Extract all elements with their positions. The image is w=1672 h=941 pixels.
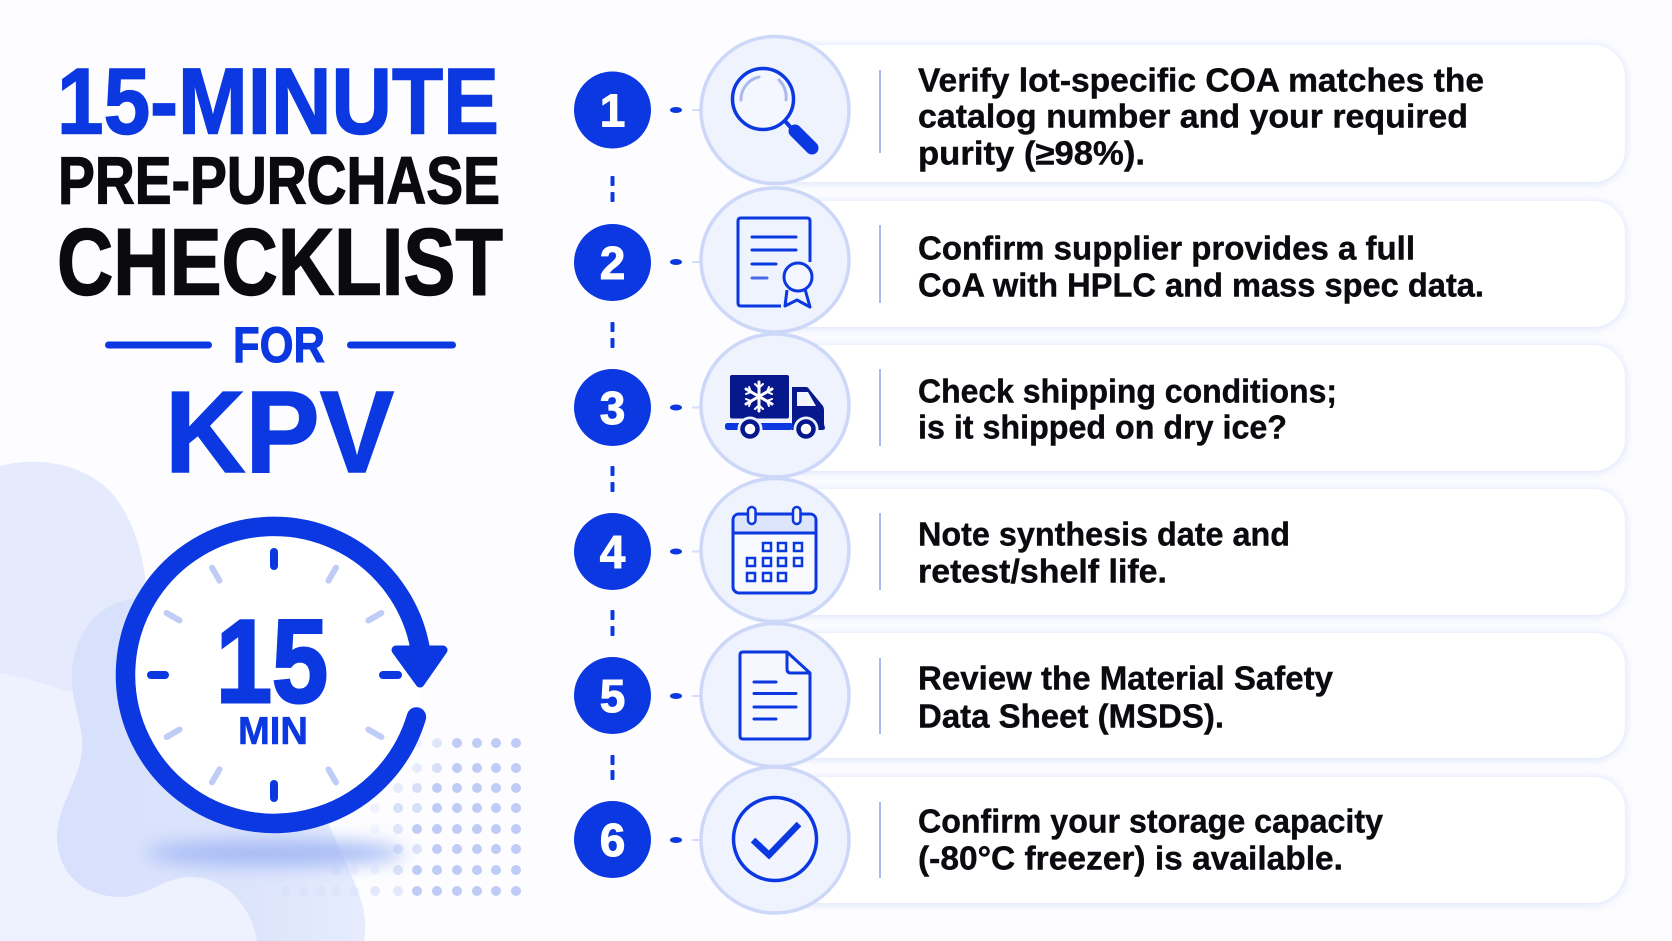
icon: calendar: [701, 478, 849, 622]
step 4 text: Note synthesis date and: [918, 516, 1290, 552]
step 5 text: Review the Material Safety: [918, 660, 1334, 696]
card 2: [745, 201, 1625, 327]
timer clock icon: [125, 526, 443, 823]
step 6 text: (-80°C freezer) is available.: [918, 840, 1343, 876]
number badge 5: [574, 657, 651, 734]
title line: CHECKLIST: CHECKLIST: [57, 210, 503, 316]
step 5: [574, 624, 1625, 766]
link dot: [670, 259, 702, 265]
divider: [879, 658, 881, 734]
card 5: [745, 633, 1625, 758]
clock number: 15: [216, 596, 328, 728]
card 3: [745, 345, 1625, 471]
card 4: [745, 489, 1625, 615]
title line: PRE-PURCHASE: PRE-PURCHASE: [58, 144, 500, 218]
number badge 2: 2: [600, 237, 625, 289]
link dot: [670, 548, 702, 554]
number badge 2: [574, 224, 651, 301]
decorative background blobs: [0, 462, 365, 941]
clock face: [126, 527, 422, 823]
step 3: [574, 334, 1625, 477]
card 1: [745, 45, 1625, 182]
step 3 text: [918, 372, 1337, 446]
step 4 text: [918, 516, 1290, 590]
circular arrow: [125, 526, 443, 823]
step 2: [574, 188, 1625, 332]
FOR divider: [105, 317, 456, 373]
divider: [879, 70, 881, 153]
card 6: [745, 777, 1625, 903]
step 5 text: Data Sheet (MSDS).: [918, 698, 1224, 734]
icon: magnifying glass: [701, 36, 849, 184]
minute ticks: [151, 552, 398, 798]
step 3 text: Check shipping conditions;: [918, 372, 1337, 410]
icon: document: [701, 624, 849, 766]
step 6 text: [918, 802, 1384, 876]
step 6: [574, 767, 1625, 913]
number badge 1: 1: [600, 84, 625, 136]
divider: [879, 802, 881, 878]
step 1 text: [918, 62, 1484, 172]
number badge 1: [574, 72, 651, 148]
step 1 text: catalog number and your required: [918, 98, 1468, 134]
title line: KPV: KPV: [165, 367, 394, 497]
connectors between numbered steps: [610, 176, 614, 780]
link dot: [670, 404, 702, 410]
link dot: [670, 837, 702, 843]
number badge 4: [574, 513, 651, 590]
step 3 text: is it shipped on dry ice?: [918, 408, 1287, 446]
step 6 text: Confirm your storage capacity: [918, 802, 1384, 840]
divider: [879, 225, 881, 303]
icon: certificate: [701, 188, 849, 332]
FOR divider: FOR: [233, 317, 325, 373]
link dot: [670, 693, 702, 699]
halftone dots: [281, 738, 521, 896]
step 2 text: CoA with HPLC and mass spec data.: [918, 266, 1484, 304]
number badge 3: 3: [600, 382, 625, 434]
clock shadow: [145, 840, 405, 866]
step 2 text: [918, 230, 1484, 304]
step 1 text: Verify lot-specific COA matches the: [918, 62, 1484, 98]
number badge 3: [574, 369, 651, 446]
step 5 text: [918, 660, 1334, 734]
step 4 text: retest/shelf life.: [918, 552, 1167, 590]
icon: check mark: [701, 767, 849, 913]
clock unit: MIN: [238, 710, 308, 753]
divider: [879, 513, 881, 590]
icon: refrigerated truck: [701, 334, 849, 477]
number badge 6: [574, 801, 651, 878]
step 2 text: Confirm supplier provides a full: [918, 230, 1415, 266]
number badge 6: 6: [600, 814, 625, 866]
step 1 text: purity (≥98%).: [918, 134, 1145, 172]
link dot: [670, 107, 702, 113]
title: [57, 48, 503, 497]
step 4: [574, 478, 1625, 622]
number badge 5: 5: [600, 670, 625, 722]
divider: [879, 369, 881, 446]
title line: 15-MINUTE: 15-MINUTE: [57, 48, 499, 154]
step 1: [574, 36, 1625, 184]
number badge 4: 4: [600, 526, 626, 578]
